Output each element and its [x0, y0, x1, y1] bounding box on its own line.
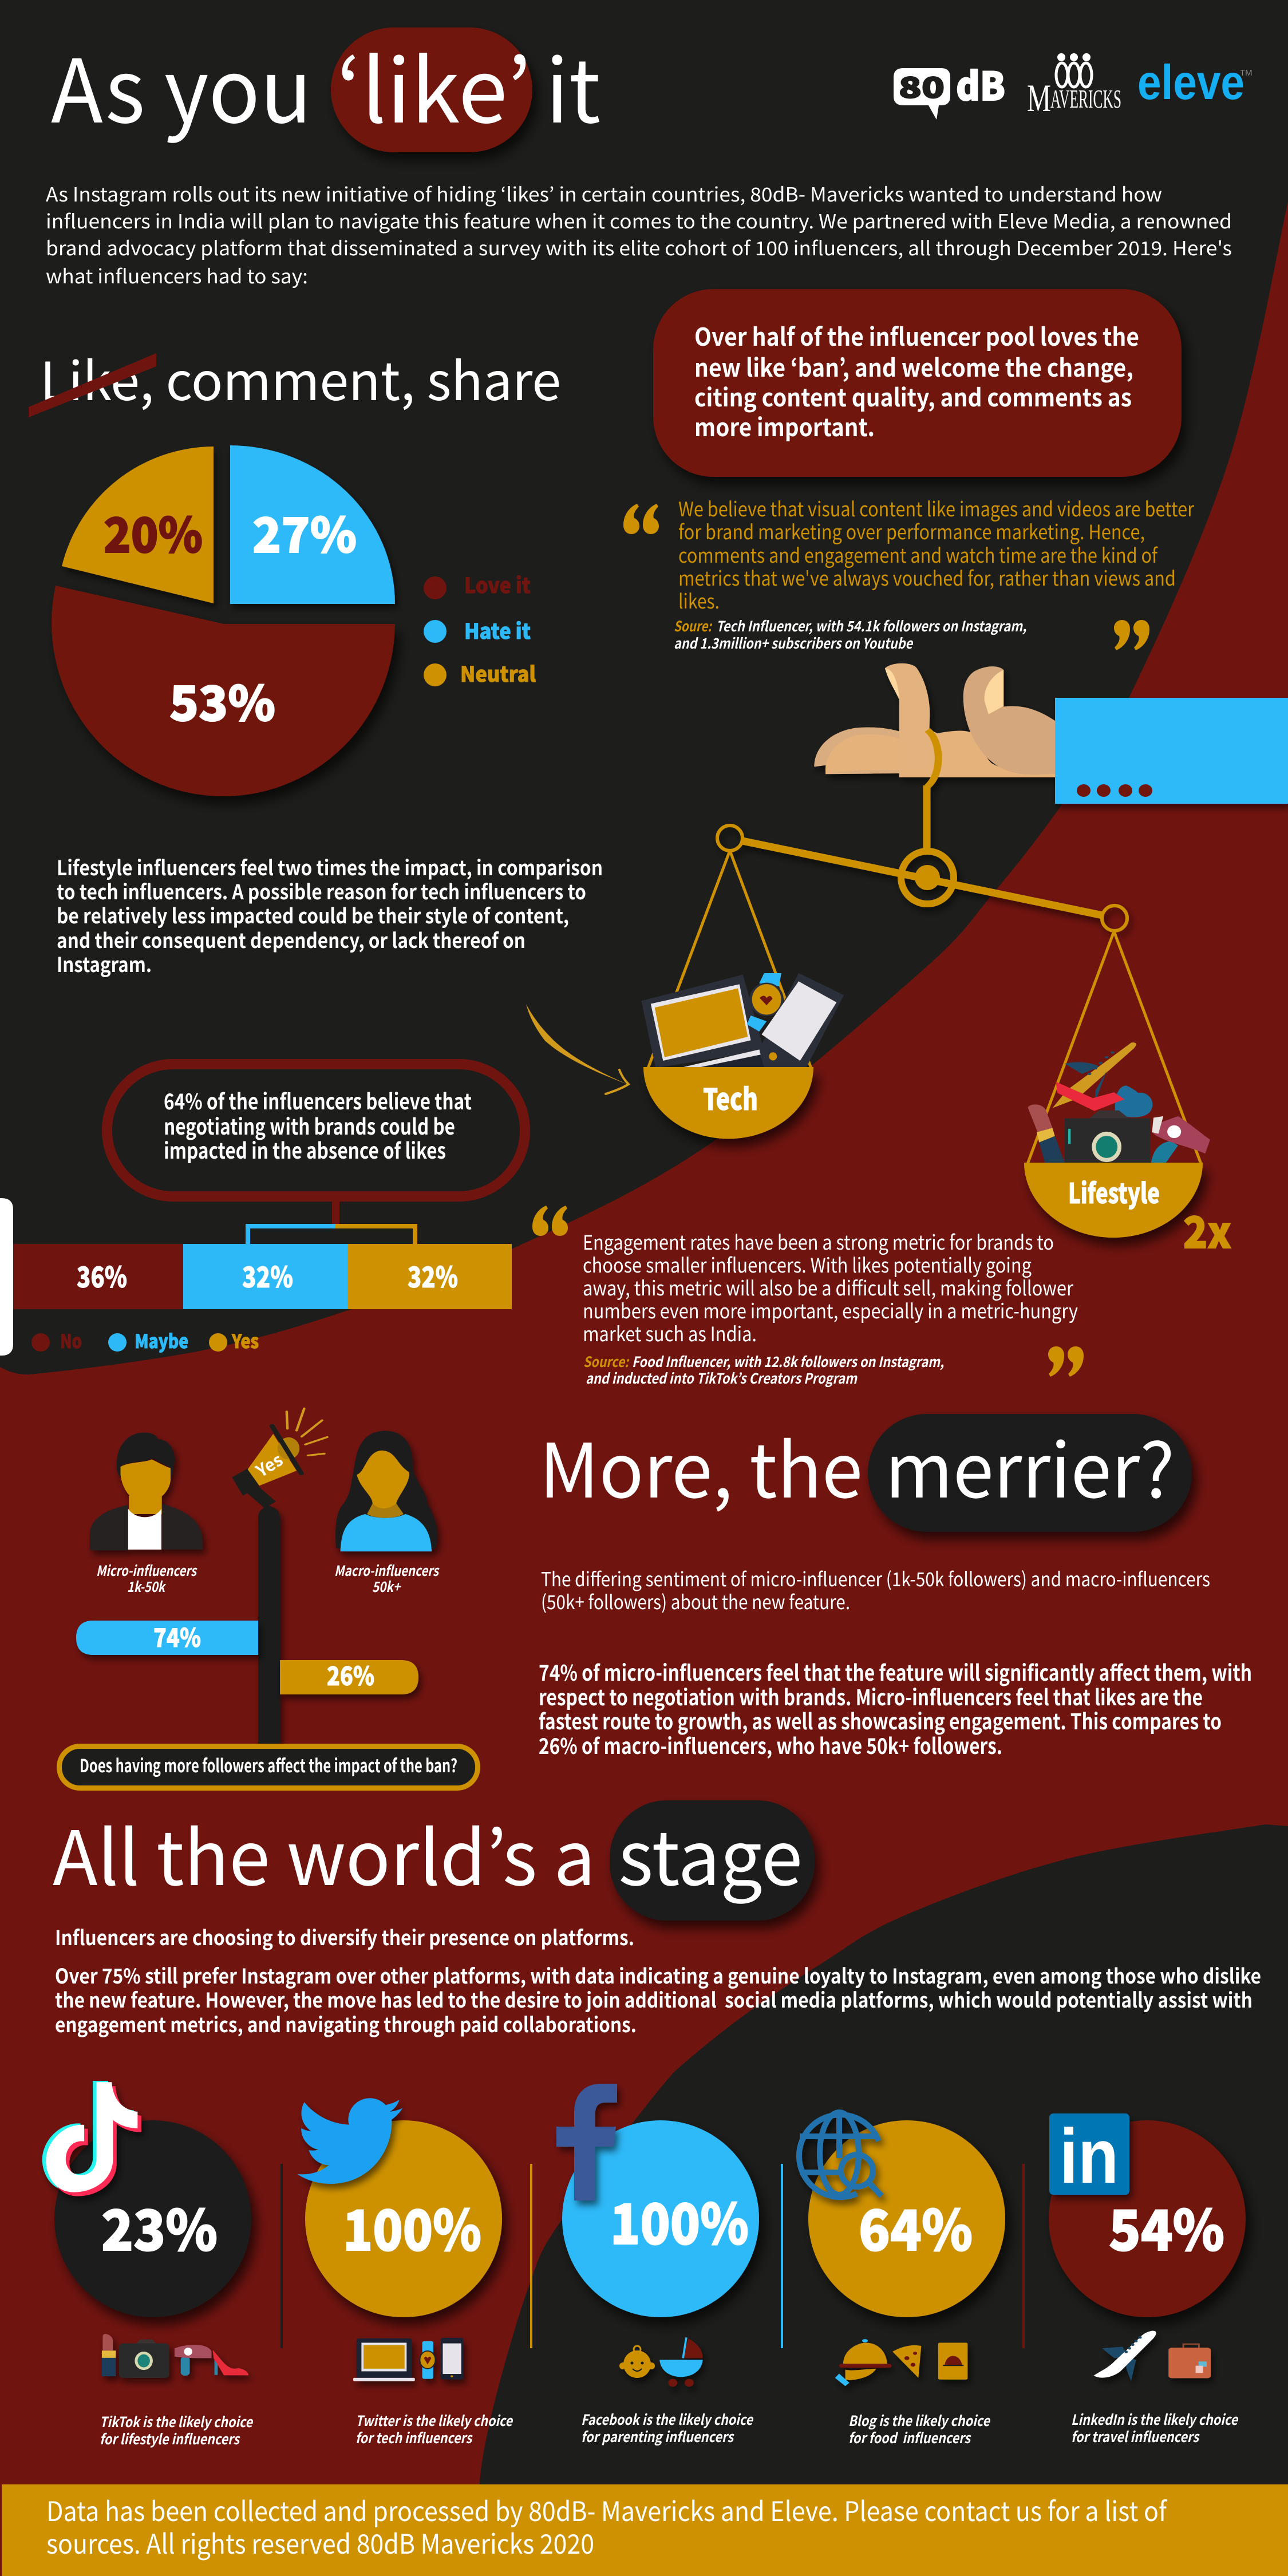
quote source — [583, 1351, 944, 1388]
captions — [100, 2409, 1239, 2449]
white side tab — [0, 1198, 13, 1356]
tech devices — [641, 973, 844, 1068]
icons: parenting set — [619, 2337, 703, 2387]
icon: Twitter bird — [297, 2098, 402, 2184]
influencer labels: 1k-50k — [127, 1576, 166, 1597]
pan bowl — [643, 1067, 813, 1139]
icon: Facebook f — [556, 2084, 617, 2200]
callout pill: 64%: 64% of the influencers believe that — [164, 1084, 472, 1116]
footer — [2, 2484, 1288, 2576]
paragraph: lifestyle vs tech: Lifestyle influencers feel two times the impact, in comparison — [57, 852, 603, 882]
callout: over half: new like ‘ban’, and welcome the change, — [694, 349, 1133, 384]
pole — [258, 1506, 280, 1744]
title words: it — [546, 22, 600, 148]
caption: LinkedIn: for travel influencers — [1071, 2426, 1200, 2447]
caption: Twitter: for tech influencers — [355, 2427, 473, 2448]
caption: Blog: Blog is the likely choice — [848, 2410, 991, 2431]
paragraph: lifestyle vs tech: be relatively less impacted could be their style of content, — [57, 900, 569, 930]
close quote mark — [1048, 1346, 1084, 1377]
quote source: Source: — [583, 1351, 630, 1372]
callout: over half: more important. — [694, 408, 875, 444]
sleeve — [1055, 698, 1288, 804]
quote source: Tech Influencer, with 54.1k followers on Instagram, — [716, 615, 1026, 636]
logo: eleve: TM — [1240, 68, 1253, 78]
caption: Facebook: for parenting influencers — [581, 2426, 734, 2447]
quote text: Engagement rates have been a strong metric for brands to — [583, 1227, 1054, 1256]
heading: like, comment, share: Like, comment, share — [40, 339, 561, 416]
pan bowl — [1024, 1163, 1203, 1238]
logo: Mavericks: AVERICKS — [1050, 84, 1121, 113]
strings — [1028, 931, 1201, 1164]
strike-through bar — [29, 353, 156, 417]
text: diversify presence: engagement metrics, and navigating through paid collaborations. — [55, 2009, 637, 2038]
callout: over half: citing content quality, and comments as — [694, 378, 1132, 414]
stacked bar chart: 36% — [77, 1255, 127, 1296]
pie labels: 20% — [104, 497, 203, 567]
icon: globe search — [799, 2112, 882, 2197]
callout pill: 64% — [107, 1064, 525, 1196]
logos — [894, 53, 1253, 120]
logo: 80dB — [894, 55, 1005, 120]
intro text: brand advocacy platform that disseminated a survey with its elite cohort of 100 influencers, all through December 2019. Here's — [46, 233, 1232, 261]
platform circle: Blog — [799, 2112, 1005, 2317]
callout pill: 64%: impacted in the absence of likes — [164, 1133, 446, 1165]
bar: macro 26% — [280, 1656, 418, 1694]
question pill — [60, 1746, 477, 1788]
open quote mark — [623, 504, 659, 534]
logo: eleve: eleve — [1137, 56, 1244, 110]
bar: macro 26%: 26% — [327, 1656, 374, 1693]
callout: over half: Over half of the influencer pool loves the — [694, 318, 1139, 353]
background: top dark wave — [0, 0, 1288, 1374]
quote text: choose smaller influencers. With likes potentially going — [583, 1250, 1032, 1279]
intro text: As Instagram rolls out its new initiative of hiding ‘likes’ in certain countries, 80dB- Mavericks wanted to understand how — [46, 179, 1162, 207]
platform circle: Blog: 64% — [859, 2186, 973, 2266]
quote text — [678, 493, 1194, 615]
intro text: what influencers had to say: — [46, 261, 308, 289]
slice: love it 53% — [52, 586, 395, 796]
platform circle: TikTok — [42, 2081, 251, 2317]
bar: micro 74% — [76, 1617, 258, 1655]
question pill: Does having more followers affect the impact of the ban? — [80, 1752, 457, 1778]
bar legend: Yes — [231, 1326, 259, 1354]
quote text: metrics that we've always vouched for, rather than views and — [678, 563, 1176, 592]
pan label: Lifestyle — [1068, 1171, 1160, 1211]
icon: macro-influencer person — [335, 1431, 437, 1551]
influencer labels — [96, 1560, 440, 1597]
platform circle: LinkedIn — [1049, 2113, 1246, 2317]
heading: all the world's a stage: stage — [618, 1798, 803, 1907]
heading: more, the merrier — [539, 1411, 1192, 1532]
icon: hand with sleeve — [814, 663, 1288, 804]
pie labels: 53% — [169, 666, 275, 735]
pie legend: Neutral — [460, 657, 536, 688]
paragraph: lifestyle vs tech: to tech influencers. A possible reason for tech influencers to — [57, 876, 586, 906]
bar legend: Maybe — [135, 1326, 188, 1354]
caption: TikTok: for lifestyle influencers — [100, 2428, 240, 2449]
caption: Twitter: Twitter is the likely choice — [355, 2410, 513, 2431]
platform circle: TikTok: 23% — [101, 2186, 218, 2266]
title highlight pill — [331, 27, 532, 152]
paragraph: lifestyle vs tech: Instagram. — [57, 949, 152, 978]
text: differing sentiment — [541, 1564, 1210, 1615]
icon: micro-influencer person — [90, 1433, 203, 1550]
hand — [814, 663, 1055, 787]
balance scale — [717, 785, 1127, 931]
caption: Facebook: Facebook is the likely choice — [581, 2409, 754, 2429]
left hanger ring — [717, 825, 742, 851]
title — [51, 22, 600, 152]
quote text: for brand marketing over performance marketing. Hence, — [678, 516, 1145, 546]
text: 74% of micro-influencers: 26% of macro-influencers, who have 50k+ followers. — [539, 1729, 1002, 1760]
text: 74% of micro-influencers — [539, 1656, 1252, 1760]
icon: TikTok note — [42, 2081, 141, 2196]
influencer labels: 50k+ — [372, 1576, 401, 1597]
right hanger ring — [1102, 906, 1127, 931]
scale pivot — [901, 851, 954, 904]
close quote mark — [1114, 620, 1149, 650]
title words: ‘like’ — [337, 22, 531, 148]
influencer labels: Macro-influencers — [334, 1560, 440, 1581]
intro text: influencers in India will plan to navigate this feature when it comes to the country. We partnered with Eleve Media, a renowned — [46, 206, 1232, 234]
icon: megaphone: Yes — [250, 1446, 287, 1483]
logo: Mavericks: M — [1027, 76, 1051, 120]
pan label: Tech — [703, 1076, 758, 1119]
scale pan: lifestyle — [1024, 931, 1210, 1238]
heading: more, the merrier: merrier? — [885, 1411, 1175, 1519]
icon: LinkedIn: in — [1060, 2113, 1119, 2199]
pie legend: Hate it — [464, 614, 531, 645]
platform circle: LinkedIn: 54% — [1109, 2186, 1224, 2266]
caption: TikTok — [100, 2411, 254, 2449]
caption: TikTok: TikTok is the likely choice — [100, 2411, 254, 2432]
stacked bar chart: 32% — [408, 1255, 458, 1296]
icons: food set — [835, 2339, 967, 2386]
caption: Blog: for food influencers — [848, 2427, 971, 2448]
quote source: Soure: — [674, 615, 713, 636]
text: diversify presence — [55, 1922, 1261, 2038]
caption: Facebook — [581, 2409, 754, 2447]
pie labels: 27% — [252, 497, 357, 567]
paragraph: lifestyle vs tech — [57, 852, 603, 978]
quote text — [583, 1227, 1078, 1348]
heading pill — [868, 1414, 1192, 1532]
icons: travel set — [1094, 2331, 1211, 2381]
multiplier: 2x: 2x — [1183, 1198, 1231, 1261]
bar legend — [31, 1326, 259, 1354]
scale pan: tech — [641, 851, 844, 1139]
logo: 80dB: 80 — [899, 65, 945, 106]
open quote mark — [532, 1206, 568, 1236]
icons: lifestyle set — [102, 2334, 248, 2378]
quote source: and 1.3million+ subscribers on Youtube — [674, 633, 914, 653]
heading: more, the merrier: More, the — [539, 1411, 863, 1519]
heading pill — [610, 1800, 815, 1921]
caption: Blog — [848, 2410, 991, 2448]
dividers — [280, 2164, 1025, 2348]
caption: LinkedIn: LinkedIn is the likely choice — [1071, 2409, 1239, 2429]
pie labels — [104, 497, 357, 735]
caption: LinkedIn — [1071, 2409, 1239, 2447]
slice: neutral 20% — [62, 447, 214, 603]
quote text: comments and engagement and watch time are the kind of — [678, 540, 1158, 569]
title words — [51, 22, 600, 148]
logo: 80dB: dB — [956, 55, 1005, 112]
stacked bar chart — [13, 1244, 512, 1309]
quote text: numbers even more important, especially in a metric-hungry — [583, 1295, 1078, 1325]
quote source: and inducted into TikTok’s Creators Program — [586, 1368, 858, 1388]
platform circle: Twitter: 100% — [343, 2186, 481, 2266]
bar legend: No — [60, 1326, 82, 1354]
quote source — [674, 615, 1026, 653]
bar: micro 74%: 74% — [153, 1617, 201, 1654]
sleeve buttons — [1077, 784, 1152, 797]
callout pill: 64%: negotiating with brands could be — [164, 1109, 455, 1141]
footer: sources. All rights reserved 80dB Mavericks 2020 — [46, 2522, 594, 2562]
quote: food influencer — [532, 1206, 1084, 1388]
quote text: We believe that visual content like images and videos are better — [678, 493, 1194, 523]
icons: tech set — [353, 2338, 463, 2381]
stacked bar chart: 32% — [242, 1255, 293, 1296]
background: bottom dark wave — [480, 1824, 1288, 2484]
quote text: likes. — [678, 586, 720, 615]
quote source: Food Influencer, with 12.8k followers on Instagram, — [632, 1351, 944, 1372]
platform circle: Twitter — [297, 2098, 502, 2317]
caption: Twitter — [355, 2410, 513, 2448]
slice: hate it 27% — [230, 445, 395, 604]
strings — [648, 851, 811, 1068]
text: diversify presence: Influencers are choosing to diversify their presence on platforms. — [55, 1922, 634, 1951]
title words: As you — [51, 22, 312, 148]
icon: megaphone — [232, 1408, 327, 1505]
lifestyle objects — [1028, 1042, 1210, 1163]
arrow: hand-drawn to tech pan — [526, 1004, 629, 1094]
pie legend — [424, 568, 536, 688]
footer: Data has been collected and processed by 80dB- Mavericks and Eleve. Please contact us for a list of — [46, 2490, 1168, 2529]
paragraph: lifestyle vs tech: and their consequent dependency, or lack thereof on — [57, 924, 526, 954]
logo: Mavericks — [1027, 53, 1121, 120]
platform circle: Facebook — [556, 2084, 759, 2317]
text: differing sentiment: (50k+ followers) about the new feature. — [541, 1587, 850, 1615]
quote: tech influencer — [623, 493, 1194, 653]
quote text: market such as India. — [583, 1318, 757, 1348]
text: differing sentiment: The differing sentiment of micro-influencer (1k-50k followers) and macro-influencers — [541, 1564, 1210, 1592]
callout: over half — [653, 289, 1182, 477]
pie chart — [52, 445, 395, 796]
pie legend: Love it — [464, 568, 531, 599]
heading: all the world's a stage — [53, 1798, 815, 1921]
scale rope — [923, 785, 931, 849]
platform circle: Facebook: 100% — [610, 2179, 749, 2260]
scale beam — [742, 841, 1103, 915]
influencer labels: Micro-influencers — [96, 1560, 197, 1581]
intro text — [46, 179, 1232, 289]
connector bracket — [248, 1202, 415, 1244]
heading: all the world's a stage: All the world’s a — [53, 1798, 595, 1907]
quote text: away, this metric will also be a difficult sell, making follower — [583, 1273, 1073, 1302]
